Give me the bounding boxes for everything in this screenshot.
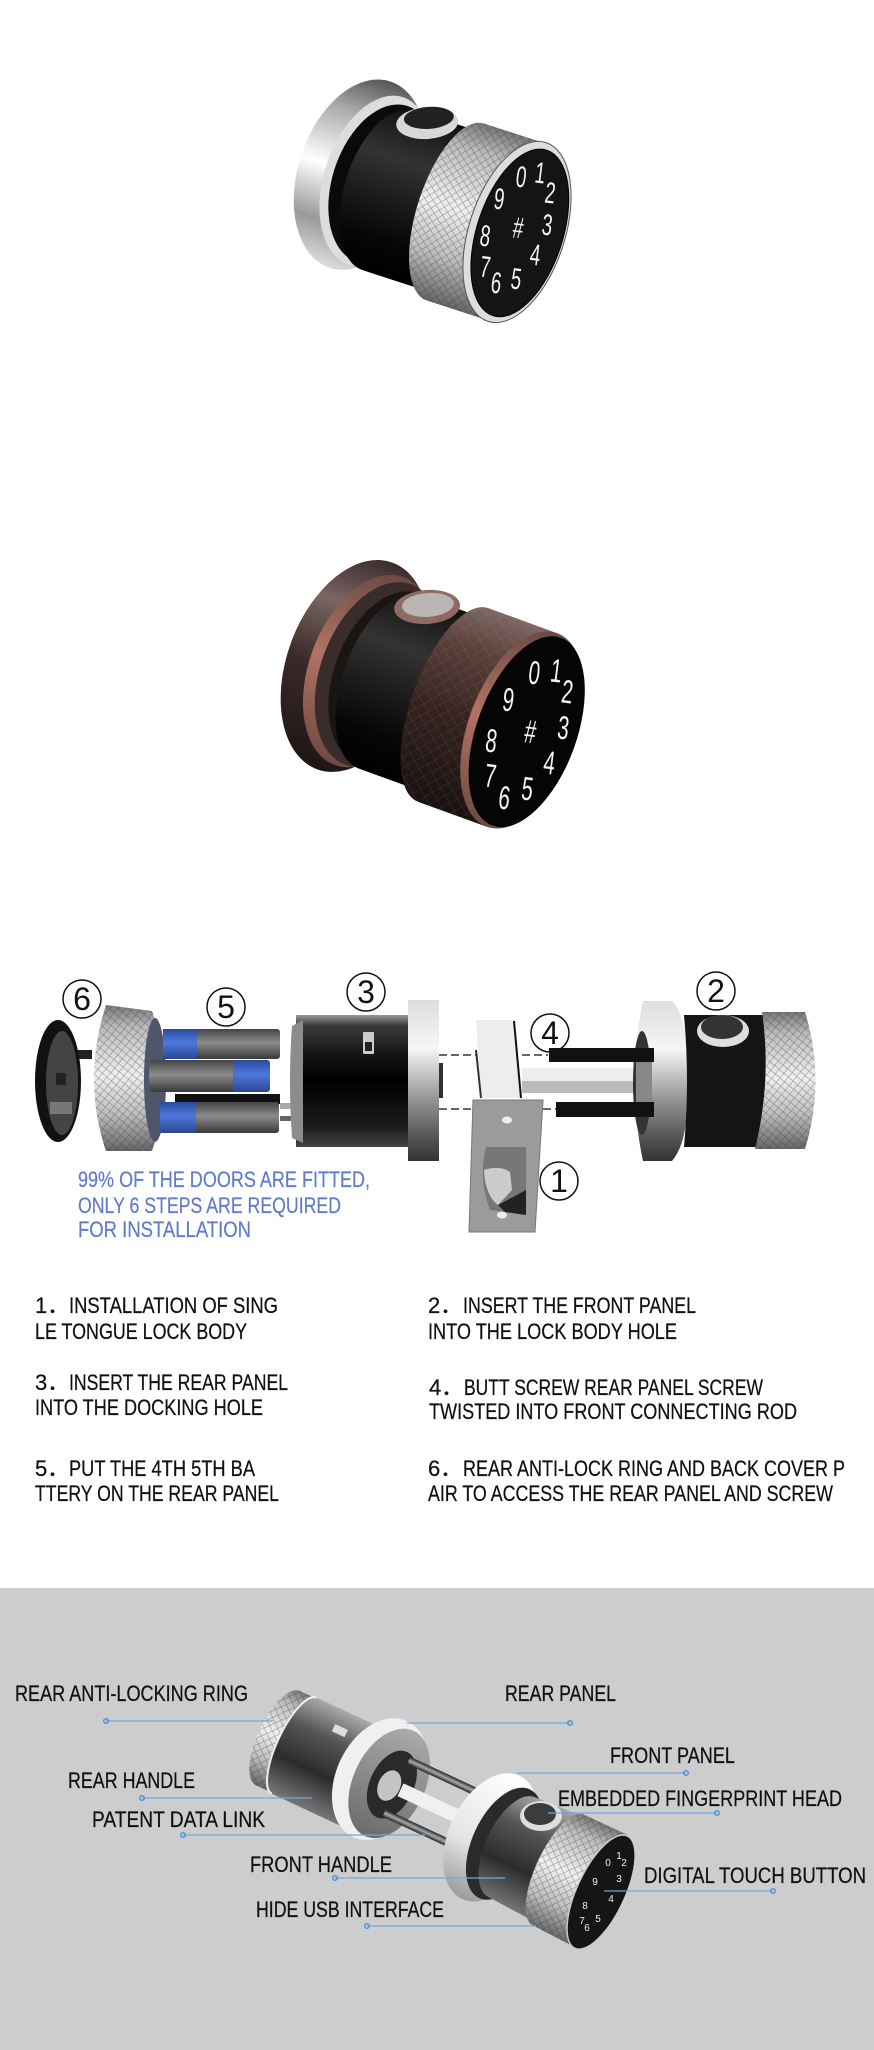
- keypad digits: 2: [621, 1858, 627, 1869]
- blue callout text: ONLY 6 STEPS ARE REQUIRED: [78, 1193, 341, 1218]
- keypad digits: 9: [492, 182, 506, 217]
- knurled ring: [94, 1005, 166, 1151]
- keypad digits: 1: [616, 1851, 622, 1862]
- lock body tongue: [476, 1020, 521, 1098]
- step 4: TWISTED INTO FRONT CONNECTING ROD: [429, 1399, 797, 1424]
- step 2: INTO THE LOCK BODY HOLE: [428, 1319, 677, 1344]
- keypad digits: 3: [616, 1874, 622, 1885]
- keypad digits: 4: [528, 238, 542, 273]
- installation steps text: [35, 1293, 845, 1506]
- blue callout text: FOR INSTALLATION: [78, 1217, 251, 1242]
- number badge 5: [207, 988, 245, 1026]
- step 4: 4．: [429, 1375, 463, 1400]
- keypad digits: [482, 651, 575, 817]
- step 5: [35, 1456, 279, 1506]
- connecting rods: [522, 1048, 652, 1117]
- keypad digits: 8: [478, 219, 492, 254]
- label: front handle: [250, 1852, 505, 1880]
- batteries (part 5): [149, 1029, 280, 1133]
- label: rear anti-locking ring: REAR ANTI-LOCKING RING: [15, 1681, 248, 1706]
- step 4: [429, 1375, 797, 1424]
- front flange: [424, 1758, 562, 1919]
- keypad digits: 3: [540, 208, 554, 243]
- keypad digits: 6: [489, 266, 503, 301]
- number badge 3: 3: [357, 974, 375, 1010]
- black body: [314, 579, 488, 793]
- step 1: LE TONGUE LOCK BODY: [35, 1319, 247, 1344]
- label: hide usb interface: [256, 1897, 536, 1928]
- bronze lock product photo: [253, 539, 612, 849]
- rear knurled handle: [238, 1682, 318, 1794]
- keypad digits: 4: [608, 1894, 614, 1905]
- front body: [464, 1784, 583, 1922]
- number badge 3: [347, 973, 385, 1011]
- keypad face: [442, 128, 592, 336]
- keypad face: [553, 1826, 649, 1958]
- rear panel (part 3): [280, 1000, 439, 1161]
- step 1: INSTALLATION OF SING: [69, 1293, 278, 1318]
- number badge 1: [540, 1162, 578, 1200]
- number badge 6: [63, 980, 101, 1018]
- front flange: [630, 1001, 687, 1161]
- step 6: [428, 1456, 845, 1506]
- keypad face: [436, 615, 609, 846]
- silver base ring: [271, 62, 461, 291]
- fingerprint sensor: [520, 1801, 562, 1831]
- step 3: [35, 1370, 288, 1420]
- exploded installation diagram: [35, 972, 816, 1232]
- label: rear panel: REAR PANEL: [505, 1681, 616, 1706]
- step 1: 1．: [35, 1293, 69, 1318]
- label: front handle: FRONT HANDLE: [250, 1852, 392, 1877]
- keypad digits: 8: [483, 721, 499, 760]
- step 3: INTO THE DOCKING HOLE: [35, 1395, 263, 1420]
- front panel body (part 2): [684, 1012, 816, 1149]
- label: rear handle: [68, 1768, 312, 1800]
- keypad digits: [579, 1851, 627, 1934]
- number badge 4: 4: [541, 1015, 559, 1051]
- keypad digits: 5: [595, 1914, 601, 1925]
- fingerprint sensor: [393, 588, 461, 626]
- label: patent data link: [92, 1807, 425, 1837]
- number badge 5: 5: [217, 989, 235, 1025]
- step 2: 2．: [428, 1293, 462, 1318]
- keypad digits: 0: [514, 160, 528, 195]
- number badge 6: 6: [73, 981, 91, 1017]
- keypad digits: [478, 156, 557, 301]
- step 5: PUT THE 4TH 5TH BA: [69, 1456, 255, 1481]
- step 3: 3．: [35, 1370, 69, 1395]
- keypad digits: 4: [541, 743, 557, 782]
- panel: parts diagram: [0, 1588, 874, 2050]
- keypad digits: 9: [500, 680, 516, 719]
- keypad digits: 3: [555, 708, 571, 747]
- number badge 2: 2: [707, 973, 725, 1009]
- blue callout text: 99% OF THE DOORS ARE FITTED,: [78, 1167, 370, 1192]
- step 6: 6．: [428, 1456, 462, 1481]
- keypad digits: 1: [548, 651, 564, 690]
- number badge 2: [697, 972, 735, 1010]
- step 5: TTERY ON THE REAR PANEL: [35, 1481, 279, 1506]
- exploded lock, diagonal: [231, 1666, 654, 1961]
- label: rear anti-locking ring: [15, 1681, 273, 1723]
- step 3: INSERT THE REAR PANEL: [69, 1370, 288, 1395]
- step 2: INSERT THE FRONT PANEL: [463, 1293, 696, 1318]
- keypad digits: 6: [584, 1923, 590, 1934]
- back cover (part 6): [35, 1020, 92, 1142]
- connecting rods: [382, 1757, 501, 1859]
- number badge 1: 1: [550, 1163, 568, 1199]
- keypad digits: 2: [559, 672, 575, 711]
- number badge 4: [531, 1014, 569, 1052]
- keypad digits: 5: [509, 262, 523, 297]
- step 2: [428, 1293, 696, 1344]
- knurled band: [379, 594, 557, 827]
- label: digital touch button: [604, 1863, 866, 1893]
- label: rear panel: [407, 1681, 616, 1725]
- step 4: BUTT SCREW REAR PANEL SCREW: [464, 1375, 763, 1400]
- keypad digits: 0: [605, 1858, 611, 1869]
- keypad digits: 8: [582, 1901, 588, 1912]
- keypad digits: 2: [543, 176, 557, 211]
- keypad digits: 6: [496, 778, 512, 817]
- dashed alignment lines: [439, 1055, 556, 1109]
- blue callout text: [78, 1167, 370, 1242]
- silver lock product photo: [270, 62, 595, 336]
- rear body: [256, 1690, 402, 1833]
- keypad digits: 7: [579, 1916, 585, 1927]
- label: hide usb interface: HIDE USB INTERFACE: [256, 1897, 444, 1922]
- keypad digits: #: [511, 211, 525, 246]
- label: front panel: FRONT PANEL: [610, 1743, 735, 1768]
- label: rear handle: REAR HANDLE: [68, 1768, 195, 1793]
- black body: [321, 97, 486, 293]
- keypad digits: 1: [533, 156, 547, 191]
- front knurled handle: [512, 1805, 628, 1947]
- label: front panel: [517, 1743, 735, 1775]
- keypad digits: 9: [592, 1877, 598, 1888]
- label: patent data link: PATENT DATA LINK: [92, 1807, 265, 1832]
- fingerprint sensor: [395, 105, 459, 141]
- rear flange: [313, 1703, 449, 1857]
- knurled band: [390, 112, 546, 320]
- keypad digits: #: [522, 712, 539, 751]
- lock body plate (part 1): [469, 1100, 543, 1232]
- step 5: 5．: [35, 1456, 69, 1481]
- step 1: [35, 1293, 278, 1344]
- keypad digits: 7: [482, 756, 498, 795]
- keypad digits: 0: [526, 653, 542, 692]
- keypad digits: 5: [519, 769, 535, 808]
- bronze base ring: [253, 539, 476, 800]
- keypad digits: 7: [478, 250, 492, 285]
